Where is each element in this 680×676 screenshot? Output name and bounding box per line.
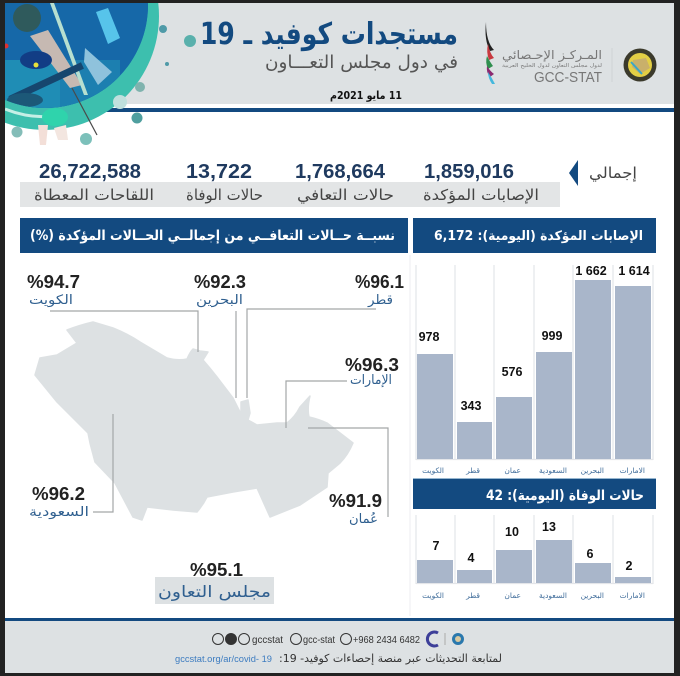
stat: vaccines	[34, 161, 154, 204]
label: UAE: %96.3	[345, 355, 399, 375]
separator	[409, 255, 411, 616]
bar chart: daily deaths: 7	[433, 539, 440, 553]
logo: GCC-STAT: لدول مجلس التعاون لدول الخليج العربية	[502, 63, 603, 69]
bar chart: daily confirmed cases: البحرين	[581, 466, 604, 475]
footer: لمتابعة التحديثات عبر منصة إحصاءات كوفيد- 19:	[279, 652, 502, 665]
label: Qatar	[355, 272, 404, 308]
bar chart: daily deaths: 4	[468, 551, 475, 565]
bar chart: daily confirmed cases: 999	[542, 329, 562, 343]
footer: gccstat	[252, 634, 283, 646]
stat: confirmed: الإصابات المؤكدة	[423, 186, 539, 204]
bar chart: daily deaths: 6	[587, 547, 594, 561]
logo: GCC-STAT: GCC-STAT	[534, 69, 602, 86]
bar chart: daily deaths: السعودية	[539, 591, 567, 600]
total label: إجمالي	[589, 164, 637, 183]
illustration: virus and syringe circle	[0, 0, 196, 145]
bar chart: daily deaths: الامارات	[620, 591, 645, 600]
leader lines	[50, 309, 388, 517]
label: Bahrain	[194, 272, 246, 308]
bar chart: daily confirmed cases: الامارات	[620, 466, 645, 475]
bar chart: daily confirmed cases: 1 662	[575, 264, 607, 278]
stat band	[20, 182, 560, 207]
bar chart: daily confirmed cases: عمان	[504, 466, 521, 475]
stat: deaths	[186, 161, 263, 204]
label: GCC total	[155, 560, 274, 604]
bar chart: daily deaths: البحرين	[581, 591, 604, 600]
panel heading: daily deaths	[413, 479, 656, 509]
label: Qatar: %96.1	[355, 272, 404, 292]
subtitle: في دول مجلس التعـــاون	[265, 52, 458, 73]
label: GCC total: %95.1	[190, 560, 243, 580]
bar chart: daily deaths: 10	[505, 525, 519, 539]
bar chart: daily confirmed cases: الكويت	[422, 466, 444, 475]
label: Bahrain: البحرين	[196, 293, 243, 308]
label: Oman: عُمان	[349, 511, 378, 527]
logo: GCC-STAT	[486, 22, 612, 86]
label: GCC total: مجلس التعاون	[158, 582, 271, 602]
stat: recovered	[295, 161, 394, 205]
stat: vaccines: 26,722,588	[39, 161, 141, 183]
title: مستجدات كوفيد ـ 19	[200, 17, 458, 52]
panel heading: recovery rate	[20, 218, 408, 253]
label: Bahrain: %92.3	[194, 272, 246, 292]
label: Kuwait: الكويت	[29, 293, 73, 308]
logo: GCC-STAT: المـركـز الإحـصائي	[502, 48, 602, 63]
panel heading: daily deaths: حالات الوفاة (اليومية): 42	[486, 488, 644, 504]
label: Saudi Arabia: %96.2	[32, 484, 85, 504]
social icons	[212, 634, 352, 644]
bar chart: daily confirmed cases: السعودية	[539, 466, 567, 475]
bar chart: daily confirmed cases: 978	[419, 330, 439, 344]
bar chart: daily deaths: قطر	[465, 591, 480, 600]
stat: confirmed	[423, 161, 539, 204]
footer	[5, 618, 674, 673]
label: Oman: %91.9	[329, 491, 382, 511]
panel heading: daily cases	[413, 218, 656, 253]
panel heading: daily cases: الإصابات المؤكدة (اليومية): 6,172	[434, 229, 643, 244]
label: Kuwait	[27, 272, 80, 308]
footer: gcc-stat	[303, 634, 335, 646]
bar chart: daily deaths	[416, 515, 653, 600]
stat: recovered: حالات التعافي	[297, 186, 394, 205]
bar chart: daily confirmed cases: 576	[502, 365, 522, 379]
bar chart: daily deaths: 13	[542, 520, 556, 534]
label: Saudi Arabia: السعودية	[29, 505, 89, 520]
date: 11 مايو 2021م	[330, 89, 402, 102]
bar chart: daily confirmed cases: 1 614	[618, 264, 650, 278]
label: UAE	[345, 355, 399, 388]
map of GCC	[35, 322, 353, 520]
stat: deaths: حالات الوفاة	[186, 186, 263, 204]
header band	[5, 3, 674, 112]
footer: gccstat.org/ar/covid- 19	[175, 654, 272, 665]
logo: GCC emblem	[624, 48, 656, 82]
bar chart: daily confirmed cases: 343	[461, 399, 481, 413]
stat: confirmed: 1,859,016	[424, 161, 514, 183]
label: UAE: الإمارات	[350, 373, 392, 388]
label: Saudi Arabia	[29, 484, 89, 520]
stat: deaths: 13,722	[186, 161, 252, 183]
panel heading: recovery rate: نسبــة حــالات التعافــي من إجمالــي الحــالات المؤكدة (%)	[30, 228, 395, 244]
label: Qatar: قطر	[367, 293, 393, 308]
label: Oman	[329, 491, 382, 527]
bar chart: daily deaths: الكويت	[422, 591, 444, 600]
icon: arrow	[569, 160, 578, 186]
footer: +968 2434 6482	[353, 634, 420, 646]
bar chart: daily deaths: عمان	[504, 591, 521, 600]
stat: vaccines: اللقاحات المعطاة	[34, 186, 154, 204]
label: Kuwait: %94.7	[27, 272, 80, 292]
bar chart: daily deaths: 2	[626, 559, 633, 573]
bar chart: daily confirmed cases	[413, 264, 656, 479]
stat: recovered: 1,768,664	[295, 161, 386, 183]
bar chart: daily confirmed cases: قطر	[465, 466, 480, 475]
